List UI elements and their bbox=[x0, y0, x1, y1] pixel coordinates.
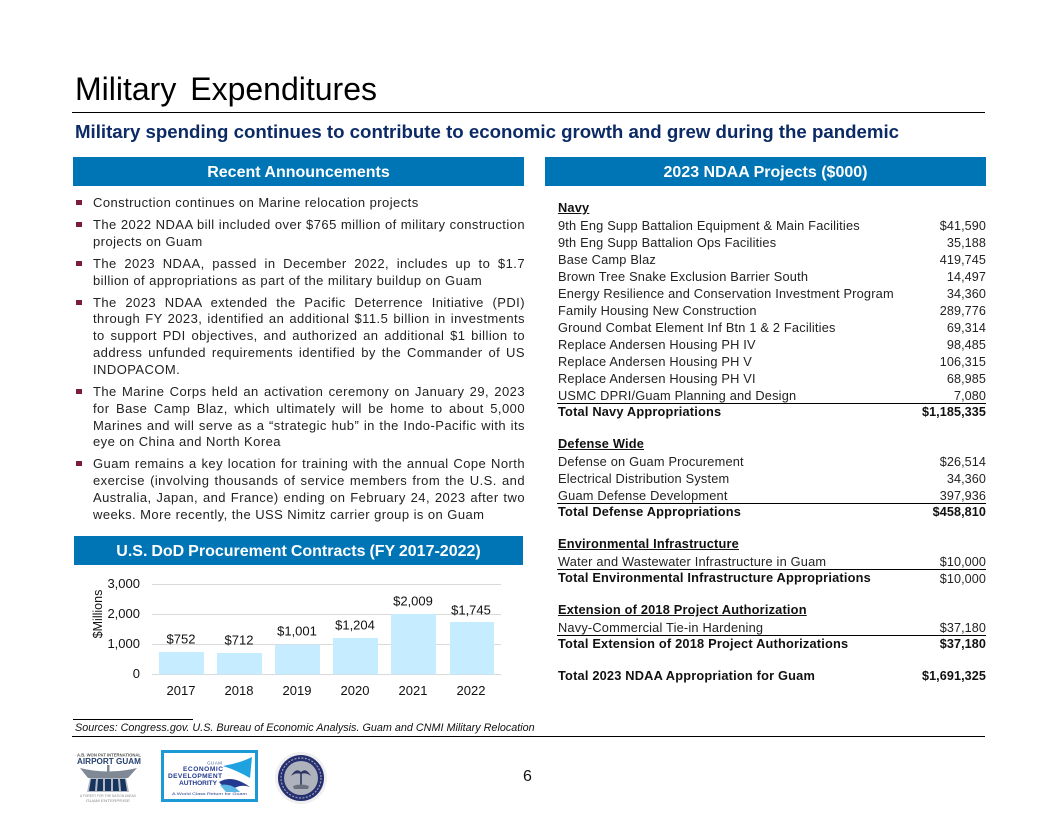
text block: announcements bullet list: Construction continues on Marine relocation projects bbox=[93, 195, 419, 210]
bar chart: DoD procurement contracts: $1,745 bbox=[451, 602, 491, 618]
table: 2023 NDAA projects: Brown Tree Snake Exclusion Barrier South bbox=[558, 269, 808, 284]
table: 2023 NDAA projects: Guam Defense Development bbox=[558, 488, 728, 503]
text block: announcements bullet list: INDOPACOM. bbox=[93, 362, 180, 377]
table: 2023 NDAA projects: 9th Eng Supp Battalion Ops Facilities bbox=[558, 235, 776, 250]
table: 2023 NDAA projects: $1,691,325 bbox=[922, 669, 986, 683]
text block: announcements bullet list: The 2023 NDAA, passed in December 2022, includes up to $1.7 bbox=[93, 256, 525, 271]
bar chart: DoD procurement contracts: 0 bbox=[133, 666, 140, 681]
table: 2023 NDAA projects: Defense Wide bbox=[558, 436, 644, 451]
text block: announcements bullet list bbox=[76, 195, 525, 522]
logo: Guam Economic Development Authority: DEVELOPMENT bbox=[168, 773, 222, 780]
bar chart: DoD procurement contracts: $1,001 bbox=[277, 624, 317, 638]
text block: announcements bullet list: The 2023 NDAA extended the Pacific Deterrence Initiative (PDI) bbox=[93, 295, 525, 310]
table: 2023 NDAA projects: Ground Combat Element Inf Btn 1 & 2 Facilities bbox=[558, 320, 836, 335]
text block: announcements bullet list: weeks. More recently, the USS Nimitz carrier group is on Guam bbox=[93, 507, 484, 522]
bar chart: DoD procurement contracts: $1,204 bbox=[335, 618, 375, 632]
table: 2023 NDAA projects: Replace Andersen Housing PH VI bbox=[558, 371, 756, 386]
table: 2023 NDAA projects: 7,080 bbox=[954, 389, 986, 403]
table: 2023 NDAA projects: Total Defense Appropriations bbox=[558, 504, 741, 519]
bar chart: DoD procurement contracts: $712 bbox=[225, 632, 253, 648]
table: 2023 NDAA projects: $10,000 bbox=[940, 555, 986, 569]
table: 2023 NDAA projects: 35,188 bbox=[947, 236, 986, 250]
bar chart: DoD procurement contracts: 1,000 bbox=[107, 636, 140, 651]
text block: announcements bullet list: eye on China and North Korea bbox=[93, 434, 281, 449]
heading: DoD procurement contracts bbox=[74, 536, 523, 565]
text block: announcements bullet list: Guam remains a key location for training with the annual Cope North bbox=[93, 456, 525, 471]
logo: Guam Economic Development Authority: AUTHORITY bbox=[179, 780, 218, 787]
table: 2023 NDAA projects: $10,000 bbox=[940, 572, 986, 586]
text block: announcements bullet list: exercise (involving thousands of service members from the U.S. and bbox=[93, 473, 525, 488]
subtitle: Military spending continues to contribute to economic growth and grew during the pandemic bbox=[75, 121, 899, 142]
logo: Guam Economic Development Authority: ECONOMIC bbox=[183, 766, 223, 773]
sources note: Sources: Congress.gov. U.S. Bureau of Economic Analysis. Guam and CNMI Military Relocation bbox=[75, 722, 535, 734]
table: 2023 NDAA projects: $458,810 bbox=[933, 505, 986, 519]
page number: 6 bbox=[523, 768, 532, 785]
table: 2023 NDAA projects: 397,936 bbox=[940, 489, 986, 503]
table: 2023 NDAA projects: Family Housing New Construction bbox=[558, 303, 757, 318]
logo: seal of Guam bbox=[275, 752, 327, 804]
heading: recent announcements bbox=[73, 157, 524, 186]
text block: announcements bullet list: The 2022 NDAA bill included over $765 million of military construction bbox=[93, 217, 525, 232]
bar chart: DoD procurement contracts: 2022 bbox=[457, 683, 485, 698]
table: 2023 NDAA projects: 9th Eng Supp Battalion Equipment & Main Facilities bbox=[558, 218, 860, 233]
bar chart: DoD procurement contracts bbox=[91, 576, 501, 698]
bar chart: DoD procurement contracts: 3,000 bbox=[107, 576, 140, 591]
bar chart: DoD procurement contracts: 2019 bbox=[283, 683, 311, 698]
table: 2023 NDAA projects: 34,360 bbox=[947, 472, 986, 486]
logo: Guam Economic Development Authority: GUAM bbox=[207, 760, 222, 766]
heading: 2023 NDAA projects bbox=[545, 157, 986, 186]
table: 2023 NDAA projects: USMC DPRI/Guam Planning and Design bbox=[558, 388, 796, 403]
logo: airport guam: AIRPORT GUAM bbox=[77, 756, 141, 766]
text block: announcements bullet list: to support PDI objectives, and authorized an additional $1 billion to bbox=[93, 328, 525, 343]
table: 2023 NDAA projects: 34,360 bbox=[947, 287, 986, 301]
table: 2023 NDAA projects: $26,514 bbox=[940, 455, 986, 469]
logo: Guam Economic Development Authority bbox=[161, 750, 258, 802]
table: 2023 NDAA projects: Water and Wastewater Infrastructure in Guam bbox=[558, 554, 826, 569]
bar chart: DoD procurement contracts: $752 bbox=[167, 632, 195, 646]
table: 2023 NDAA projects: Total 2023 NDAA Appropriation for Guam bbox=[558, 668, 815, 683]
table: 2023 NDAA projects: Environmental Infrastructure bbox=[558, 536, 739, 551]
table: 2023 NDAA projects: 289,776 bbox=[940, 304, 986, 318]
table: 2023 NDAA projects: 14,497 bbox=[947, 270, 986, 284]
text block: announcements bullet list: for Base Camp Blaz, which ultimately will be home to about 5,000 bbox=[93, 401, 525, 416]
bar chart: DoD procurement contracts: 2020 bbox=[341, 683, 369, 698]
table: 2023 NDAA projects: 98,485 bbox=[947, 338, 986, 352]
table: 2023 NDAA projects: Base Camp Blaz bbox=[558, 252, 656, 267]
bar chart: DoD procurement contracts: $Millions bbox=[91, 590, 105, 638]
logo: airport guam bbox=[77, 752, 141, 803]
bar chart: DoD procurement contracts: 2018 bbox=[225, 683, 253, 698]
table: 2023 NDAA projects: Total Extension of 2018 Project Authorizations bbox=[558, 636, 848, 651]
logo: airport guam: A.B. WON PAT INTERNATIONAL bbox=[77, 752, 141, 758]
table: 2023 NDAA projects: 106,315 bbox=[940, 355, 986, 369]
table: 2023 NDAA projects: $41,590 bbox=[940, 219, 986, 233]
table: 2023 NDAA projects: Replace Andersen Housing PH IV bbox=[558, 337, 756, 352]
table: 2023 NDAA projects: Navy-Commercial Tie-in Hardening bbox=[558, 620, 763, 635]
table: 2023 NDAA projects: 68,985 bbox=[947, 372, 986, 386]
table: 2023 NDAA projects: $1,185,335 bbox=[922, 405, 986, 419]
heading: 2023 NDAA projects: 2023 NDAA Projects ($000) bbox=[664, 164, 867, 181]
text block: announcements bullet list: The Marine Corps held an activation ceremony on January 29, 2023 bbox=[93, 384, 525, 399]
logo: airport guam: A FOREST FOR THE NATION AHEAD bbox=[80, 794, 136, 798]
table: 2023 NDAA projects: $37,180 bbox=[940, 621, 986, 635]
table: 2023 NDAA projects: $37,180 bbox=[940, 637, 986, 651]
bar chart: DoD procurement contracts: 2021 bbox=[399, 683, 427, 698]
table: 2023 NDAA projects: 69,314 bbox=[947, 321, 986, 335]
text block: announcements bullet list: address unfunded requirements identified by the Commander of US bbox=[93, 345, 525, 360]
logo: Guam Economic Development Authority: A World Class Return for Guam bbox=[172, 792, 247, 796]
table: 2023 NDAA projects: Electrical Distribution System bbox=[558, 471, 729, 486]
text block: announcements bullet list: Australia, Japan, and France) ending on February 24, 2023 after two bbox=[93, 490, 525, 505]
table: 2023 NDAA projects: Defense on Guam Procurement bbox=[558, 454, 744, 469]
table: 2023 NDAA projects: Total Navy Appropriations bbox=[558, 404, 721, 419]
text block: announcements bullet list: through FY 2023, identified an additional $11.5 billion in investments bbox=[93, 311, 525, 326]
table: 2023 NDAA projects: Extension of 2018 Project Authorization bbox=[558, 602, 807, 617]
title: Military Expenditures bbox=[75, 71, 377, 107]
bar chart: DoD procurement contracts: 2,000 bbox=[107, 606, 140, 621]
table: 2023 NDAA projects: Replace Andersen Housing PH V bbox=[558, 354, 752, 369]
text block: announcements bullet list: Marines and will serve as a “strategic hub” in the Indo-Pacific with its bbox=[93, 418, 525, 433]
bar chart: DoD procurement contracts: $2,009 bbox=[393, 594, 433, 608]
heading: DoD procurement contracts: U.S. DoD Procurement Contracts (FY 2017-2022) bbox=[116, 543, 481, 560]
text block: announcements bullet list: projects on Guam bbox=[93, 234, 203, 249]
table: 2023 NDAA projects: Total Environmental Infrastructure Appropriations bbox=[558, 570, 871, 585]
table: 2023 NDAA projects: 419,745 bbox=[940, 253, 986, 267]
text block: announcements bullet list: billion of appropriations as part of the military buildup on Guam bbox=[93, 273, 482, 288]
table: 2023 NDAA projects: Energy Resilience and Conservation Investment Program bbox=[558, 286, 894, 301]
table: 2023 NDAA projects: Navy bbox=[558, 200, 589, 215]
bar chart: DoD procurement contracts: 2017 bbox=[167, 683, 195, 698]
logo: airport guam: GUAM ENTERPRISE bbox=[86, 799, 131, 803]
heading: recent announcements: Recent Announcements bbox=[207, 164, 390, 181]
